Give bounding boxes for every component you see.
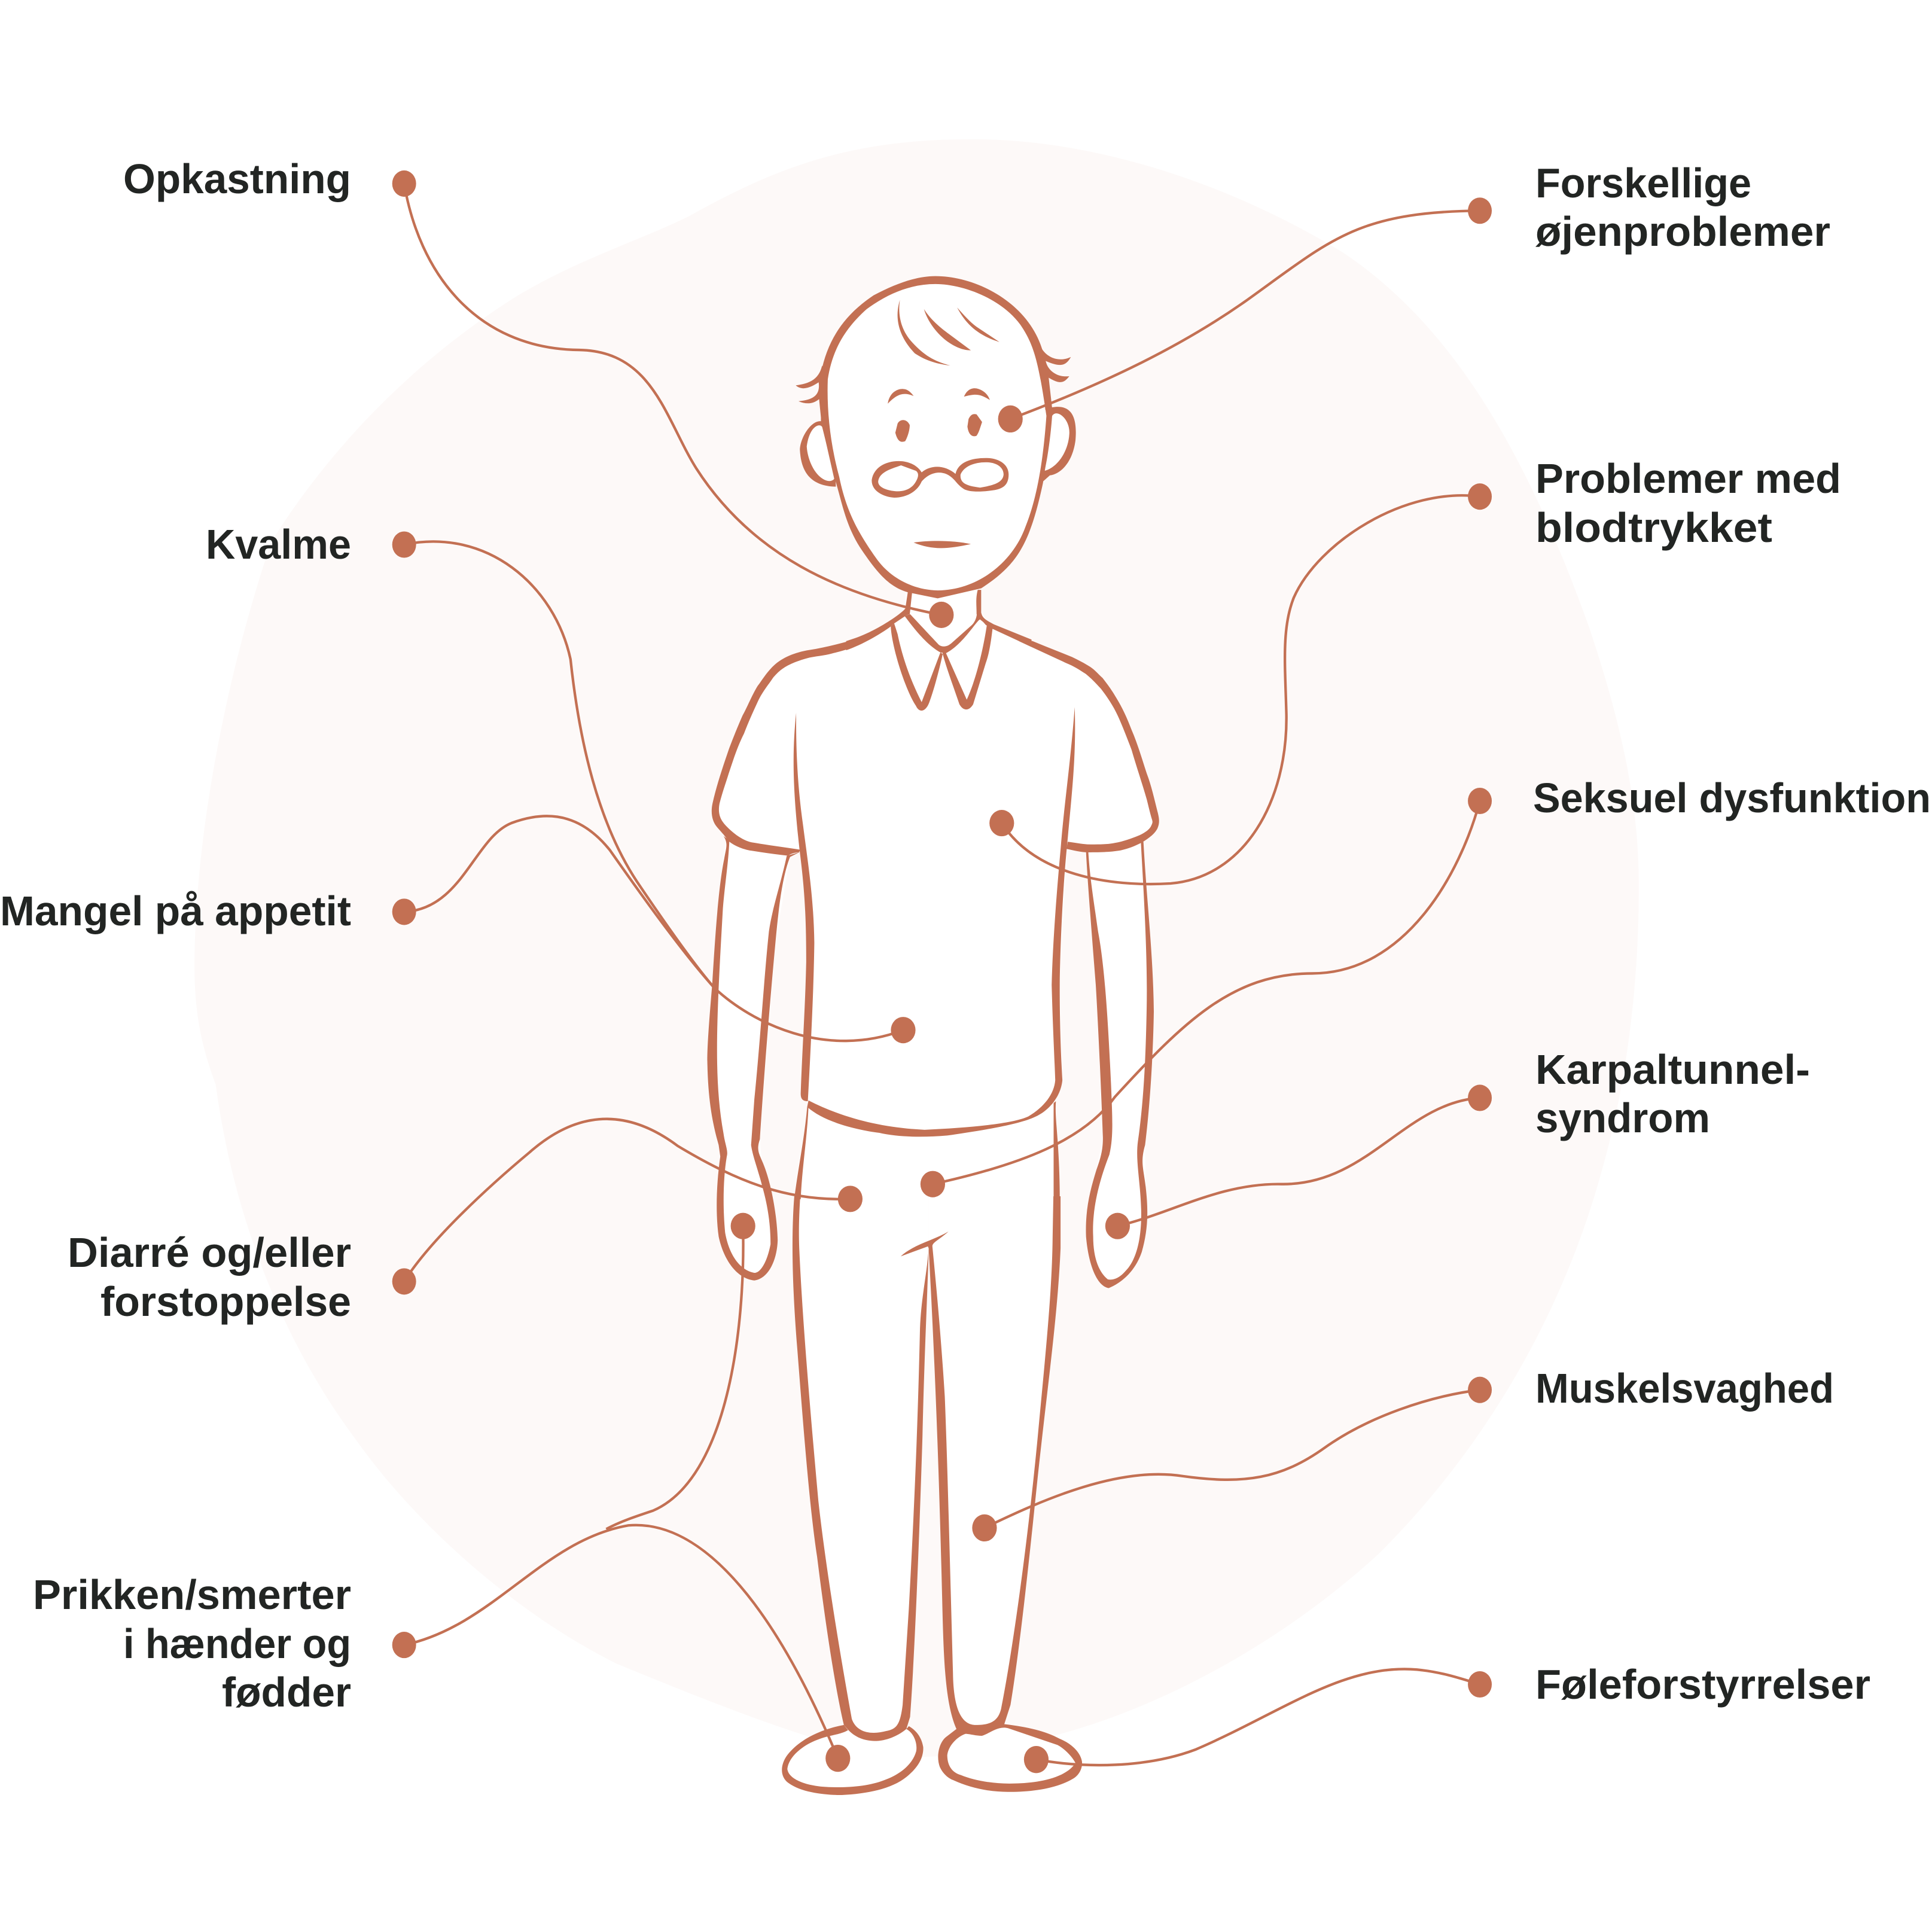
label: Prikken/smerter i hænder og fødder: fødder bbox=[222, 1669, 351, 1715]
neck left bbox=[904, 592, 912, 615]
connector: Kvalme to belly bbox=[392, 531, 715, 988]
mouth bbox=[913, 541, 971, 548]
right leg and crotch crease bbox=[901, 1196, 1061, 1736]
person figure bbox=[708, 276, 1159, 1795]
label: Diarré og/eller forstoppelse: forstoppelse bbox=[100, 1278, 351, 1325]
head, neck and collar bbox=[796, 276, 1076, 711]
background blob bbox=[194, 139, 1639, 1757]
glasses bbox=[871, 458, 1008, 498]
right arm and hand bbox=[1086, 842, 1154, 1288]
connector: Diarré to hip bbox=[392, 1119, 863, 1294]
connector lines and dots bbox=[392, 170, 1492, 1773]
right shoe bbox=[938, 1724, 1082, 1792]
right hair tufts bbox=[1042, 349, 1071, 410]
label: Muskelsvaghed: Muskelsvaghed bbox=[1535, 1365, 1834, 1412]
right torso side and shirt hem bbox=[807, 707, 1075, 1136]
upper body base bbox=[712, 587, 1158, 856]
label: Prikken/smerter i hænder og fødder: i hænder og bbox=[123, 1620, 351, 1667]
fringe strands bbox=[898, 300, 999, 365]
label: Problemer med blodtrykket: Problemer med bbox=[1535, 455, 1841, 502]
upper right leg outline bbox=[1053, 1101, 1060, 1199]
connector: øjenproblemer to eye bbox=[998, 197, 1492, 432]
right sleeve bbox=[1019, 641, 1159, 852]
connector: føleforstyrrelser to foot bbox=[1024, 1669, 1492, 1773]
label: Karpaltunnel-syndrom bbox=[1535, 1046, 1810, 1141]
label: Diarré og/eller forstoppelse: Diarré og/eller bbox=[68, 1229, 351, 1276]
collar bbox=[891, 608, 992, 711]
left shoe bbox=[782, 1725, 924, 1795]
connector: seksuel dysfunktion to groin bbox=[921, 788, 1492, 1197]
shirt sleeves and shoulders bbox=[712, 641, 1159, 856]
left shoulder bbox=[846, 608, 906, 650]
left hair tufts bbox=[796, 365, 827, 422]
connector: blodtryk to chest bbox=[989, 483, 1492, 884]
label: Mangel på appetit: Mangel på appetit bbox=[0, 888, 351, 934]
label: Føleforstyrrelser: Føleforstyrrelser bbox=[1535, 1661, 1870, 1708]
connector: karpaltunnel to hand bbox=[1105, 1084, 1492, 1239]
label: Karpaltunnel-syndrom: Karpaltunnel- bbox=[1535, 1046, 1810, 1093]
label: Problemer med blodtrykket bbox=[1535, 455, 1841, 551]
right ear bbox=[1041, 407, 1076, 482]
connector: Mangel på appetit to belly bbox=[392, 816, 916, 1043]
label: Karpaltunnel-syndrom: syndrom bbox=[1535, 1095, 1710, 1141]
label: Diarré og/eller forstoppelse bbox=[68, 1229, 351, 1325]
connector: Opkastning to throat bbox=[392, 170, 953, 628]
label: Seksuel dysfunktion: Seksuel dysfunktion bbox=[1533, 775, 1931, 821]
label: Prikken/smerter i hænder og fødder bbox=[33, 1571, 351, 1715]
label: Forskellige øjenproblemer: øjenproblemer bbox=[1535, 208, 1830, 255]
legs and shoes outline bbox=[782, 1196, 1082, 1795]
right shoulder and neck bbox=[976, 590, 1032, 647]
face outline bbox=[821, 276, 1052, 598]
connector: muskelsvaghed to thigh bbox=[972, 1377, 1492, 1541]
connector: Prikken to hand and foot bbox=[392, 1213, 850, 1772]
left sleeve bbox=[712, 641, 861, 856]
label: Forskellige øjenproblemer bbox=[1535, 160, 1830, 255]
left arm and hand bbox=[708, 836, 800, 1281]
label: Opkastning: Opkastning bbox=[123, 156, 351, 202]
label: Forskellige øjenproblemer: Forskellige bbox=[1535, 160, 1751, 206]
left ear bbox=[800, 421, 836, 487]
eyebrows bbox=[888, 388, 990, 404]
torso, arms and hands bbox=[708, 707, 1154, 1288]
left leg bbox=[793, 1196, 929, 1741]
eyes bbox=[895, 414, 982, 442]
left torso side bbox=[794, 713, 814, 1101]
upper left leg outline bbox=[794, 1107, 809, 1199]
label: Kvalme: Kvalme bbox=[206, 521, 351, 568]
label: Problemer med blodtrykket: blodtrykket bbox=[1535, 504, 1772, 551]
legs and shoes (base) bbox=[782, 1196, 1061, 1795]
label: Prikken/smerter i hænder og fødder: Prikken/smerter bbox=[33, 1571, 351, 1618]
